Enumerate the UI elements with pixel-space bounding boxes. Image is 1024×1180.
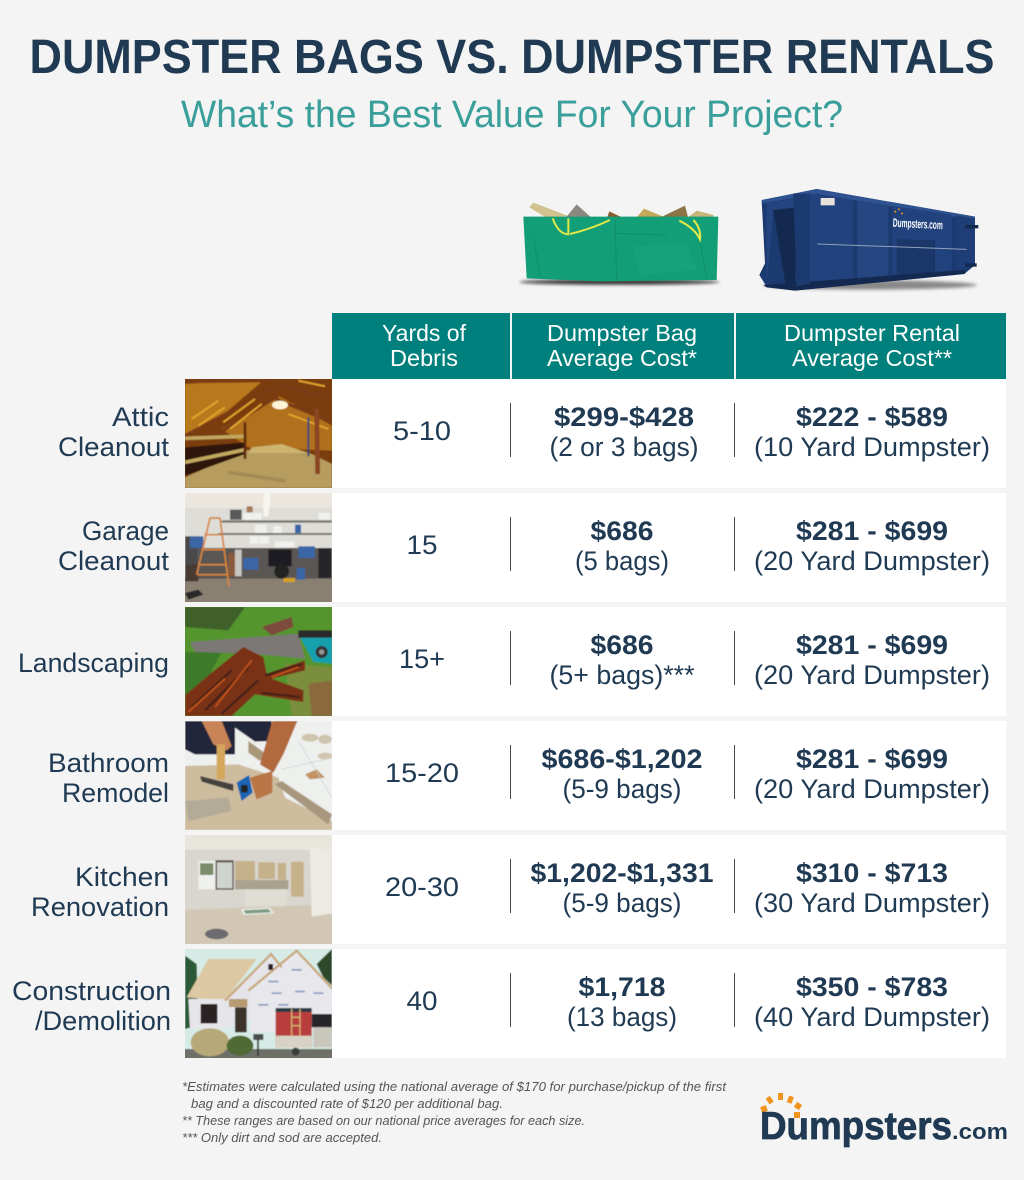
yards: 40: 40 <box>406 986 438 1016</box>
label: garage cleanout: Garage <box>82 516 169 546</box>
yards: 15: 15 <box>406 530 438 560</box>
bag cost: kitchen: (5-9 bags) <box>562 888 682 918</box>
header: dumpster bag average cost: Average Cost* <box>547 345 697 371</box>
rental cost: garage: (20 Yard Dumpster) <box>754 546 990 576</box>
rental cost: landscaping: $281 - $699 <box>796 630 948 660</box>
logo: Dumpsters.com: .com <box>952 1119 1008 1144</box>
label: construction/demolition: Construction <box>12 976 171 1006</box>
yards: 5-10: 5-10 <box>393 416 451 446</box>
bag cost: construction: $1,718 <box>578 972 666 1002</box>
rental cost: bathroom: (20 Yard Dumpster) <box>754 774 990 804</box>
rental cost: kitchen: $310 - $713 <box>796 858 948 888</box>
label: kitchen renovation: Kitchen <box>75 862 169 892</box>
image: blue roll-off dumpster <box>759 189 978 291</box>
header: dumpster rental average cost: Average Cost** <box>792 345 952 371</box>
footnotes <box>182 1079 727 1145</box>
image: green dumpster bag <box>519 203 719 285</box>
yards: 20-30: 20-30 <box>385 872 459 902</box>
header: dumpster rental average cost: Dumpster Rental <box>784 320 960 346</box>
bag cost: attic: (2 or 3 bags) <box>550 432 698 462</box>
rental cost: bathroom: $281 - $699 <box>796 744 948 774</box>
image: blue roll-off dumpster: Dumpsters.com <box>893 216 943 232</box>
bag cost: landscaping: $686 <box>590 630 654 660</box>
footnotes: *** Only dirt and sod are accepted. <box>182 1130 382 1145</box>
rental cost: attic: $222 - $589 <box>796 402 948 432</box>
photo: attic <box>185 379 332 488</box>
bag cost: bathroom: $686-$1,202 <box>542 744 702 774</box>
photo: kitchen <box>185 835 332 944</box>
photo: garage <box>185 493 332 602</box>
subtitle: What’s the Best Value For Your Project? <box>181 94 843 136</box>
bag cost: bathroom: (5-9 bags) <box>562 774 682 804</box>
table header <box>332 313 1006 379</box>
label: attic cleanout: Attic <box>112 402 169 432</box>
label: construction/demolition: /Demolition <box>35 1006 171 1036</box>
label: landscaping: Landscaping <box>18 648 169 678</box>
header: yards of debris: Yards of <box>382 320 467 346</box>
label: kitchen renovation: Renovation <box>31 892 169 922</box>
footnotes: ** These ranges are based on our national price averages for each size. <box>182 1113 585 1128</box>
label: bathroom remodel: Remodel <box>62 778 169 808</box>
bag cost: garage: $686 <box>590 516 654 546</box>
bag cost: construction: (13 bags) <box>567 1002 677 1032</box>
logo: Dumpsters.com <box>760 1093 1008 1148</box>
photo: tile demolition <box>185 721 332 830</box>
yards: 15-20: 15-20 <box>385 758 459 788</box>
rental cost: landscaping: (20 Yard Dumpster) <box>754 660 990 690</box>
row: bathroom remodel <box>48 719 1006 832</box>
rental cost: garage: $281 - $699 <box>796 516 948 546</box>
footnotes: bag and a discounted rate of $120 per additional bag. <box>191 1096 503 1111</box>
footnotes: *Estimates were calculated using the national average of $170 for purchase/pickup of the first <box>182 1079 727 1094</box>
bag cost: kitchen: $1,202-$1,331 <box>530 858 714 888</box>
rental cost: kitchen: (30 Yard Dumpster) <box>754 888 990 918</box>
label: garage cleanout: Cleanout <box>58 546 169 576</box>
row: garage cleanout <box>58 491 1006 605</box>
row: attic cleanout <box>58 377 1006 490</box>
photo: saw and branch <box>185 607 332 716</box>
bag cost: landscaping: (5+ bags)*** <box>550 660 695 690</box>
header: yards of debris: Debris <box>390 345 458 371</box>
bag cost: garage: (5 bags) <box>575 546 669 576</box>
yards: 15+: 15+ <box>399 644 445 674</box>
label: bathroom remodel: Bathroom <box>48 748 169 778</box>
row: construction/demolition <box>12 947 1006 1061</box>
label: attic cleanout: Cleanout <box>58 432 169 462</box>
rental cost: construction: $350 - $783 <box>796 972 948 1002</box>
row: landscaping <box>18 605 1006 718</box>
bag cost: attic: $299-$428 <box>554 402 694 432</box>
rental cost: attic: (10 Yard Dumpster) <box>754 432 990 462</box>
logo: Dumpsters.com: Dumpsters <box>760 1105 952 1148</box>
header: dumpster bag average cost: Dumpster Bag <box>547 320 697 346</box>
photo: house under construction <box>185 949 332 1058</box>
rental cost: construction: (40 Yard Dumpster) <box>754 1002 990 1032</box>
row: kitchen renovation <box>31 833 1006 946</box>
